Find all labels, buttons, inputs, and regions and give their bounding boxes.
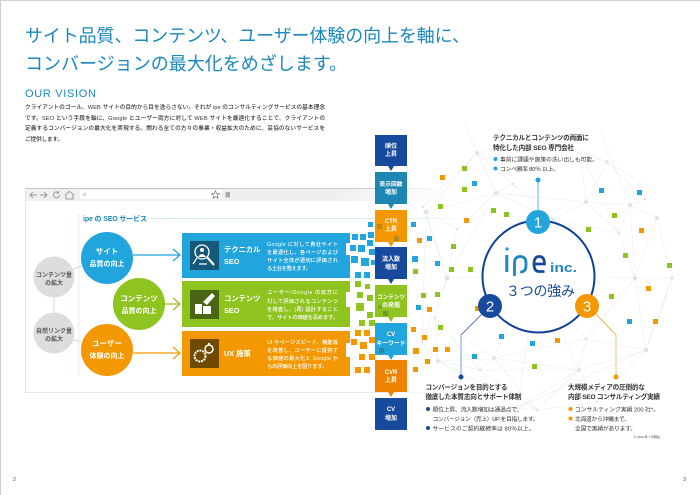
strength 2 text: コンバージョン（売上）UP を目指します。: [432, 415, 538, 423]
step: rank up: [375, 135, 407, 171]
logo: ipe inc: ３つの強み: [506, 283, 575, 299]
logo: ipe inc: [505, 247, 577, 299]
connectors between circles: [54, 265, 127, 343]
network background: [421, 120, 674, 411]
page number right: 3: [683, 477, 686, 483]
step: content discovery: の発掘: [382, 301, 400, 309]
strength 3 text: コンサルティング実績 200 社*。: [575, 406, 659, 414]
title: [25, 26, 470, 74]
circle: natural links: [34, 312, 74, 354]
step: cv keyword: キーワード: [376, 340, 406, 347]
panel: technical seo: サイト全体が適切に評価され: [267, 256, 339, 264]
arrow: site quality: [133, 249, 180, 261]
step: traffic: 増加: [385, 263, 397, 271]
circle: content quality: 品質の向上: [122, 306, 156, 315]
text block: vision body: ご提供します。: [25, 135, 63, 143]
strength 1 text: 特化した内部 SEO 専門会社: [493, 143, 574, 152]
panel: content seo: SEO: [224, 306, 240, 315]
strength 3 text: 全国で実績があります。: [575, 424, 636, 432]
strength 2 text: [426, 382, 538, 432]
panel: technical seo: テクニカル: [224, 245, 261, 254]
step: impressions: 表示回数: [379, 180, 403, 188]
badge 2: 2: [486, 298, 494, 316]
strength 2 text: コンバージョンを目的とする: [426, 382, 508, 392]
panel: ux: を改善し、ユーザーに提供す: [267, 346, 338, 354]
panel: ux: らの評価向上を図ります。: [267, 362, 327, 370]
panel: content seo: ユーザー/Google の双方に: [267, 288, 338, 296]
ipe big circle: [482, 220, 594, 332]
circle: content quality: コンテンツ: [120, 294, 158, 303]
text block: vision body: 定義するコンバージョンの最大化を実現する。関わる全ての方々の事業・収益拡大のために、妥協のないサービスを: [25, 124, 325, 132]
badge 3: 3: [583, 298, 591, 316]
step: ctr: CTR: [385, 219, 398, 225]
connector lines for strengths: [461, 180, 616, 377]
logo: ipe inc: inc.: [550, 261, 577, 275]
text block: vision body: [25, 103, 325, 143]
circle: content volume: コンテンツ量: [36, 271, 72, 279]
pixel squares leaving panels: [350, 222, 376, 373]
panel: ux: UX 施策: [224, 349, 251, 358]
panel: technical seo: SEO: [224, 257, 240, 266]
step: cvr: 上昇: [385, 376, 397, 384]
panel: content seo: [182, 281, 350, 327]
icon: browser navigation: [30, 191, 230, 199]
badge 1: 1: [534, 214, 542, 232]
circle: user experience: [80, 324, 134, 376]
strength 3 text: 大規模メディアの圧倒的な: [568, 382, 645, 392]
icon: hand with documents: [190, 290, 219, 319]
step: impressions: 増加: [385, 188, 397, 196]
icon: gears: [190, 339, 219, 368]
step: ctr: 上昇: [385, 225, 397, 233]
step: cvr: [375, 360, 407, 397]
panel: technical seo: る土台を整えます。: [267, 264, 311, 272]
dot 3: [614, 374, 618, 380]
step: content discovery: [375, 285, 407, 322]
badge 3: [575, 294, 599, 318]
panel: ux: UI やページスピード、機能等: [267, 338, 339, 346]
step: rank up: 順位: [385, 142, 397, 150]
text block: vision body: です。SEO という手段を軸に、Google とユーザー両方に対して WEB サイトを最適化することで、クライアントの: [25, 114, 325, 122]
panel: technical seo: Google に対して貴社サイト: [267, 240, 338, 248]
circle: site quality: 品質の向上: [90, 259, 124, 268]
icon: person with magnifier: [190, 241, 219, 270]
dot 2: [458, 374, 464, 380]
badge 1: [526, 210, 550, 234]
strength 1 text: [493, 133, 598, 173]
step: traffic: 流入数: [382, 255, 400, 263]
strength 1 text: テクニカルとコンテンツの両面に: [493, 133, 589, 142]
arrow: user experience: [133, 347, 180, 359]
strength 2 text: サービスのご契約継続率は 80％以上。: [432, 424, 534, 432]
step: rank up: 上昇: [385, 150, 397, 158]
step: cv increase: 増加: [385, 414, 397, 422]
panel: content seo: で、サイトの価値を高めます。: [267, 313, 338, 321]
panel: technical seo: [182, 233, 350, 278]
circle: natural links: 自然リンク量: [36, 327, 72, 335]
circle: content quality: [112, 278, 166, 330]
step: cv increase: [375, 398, 407, 430]
scattered squares: [411, 166, 672, 372]
seo service heading: ipe の SEO サービス: [83, 214, 147, 223]
circle: user experience: ユーザー: [92, 339, 122, 348]
panel: content seo: 対して評価されるコンテンツ: [267, 297, 338, 305]
panel: ux: [182, 331, 350, 376]
title: サイト品質、コンテンツ、ユーザー体験の向上を軸に、: [25, 26, 470, 46]
circle: content volume: の拡大: [45, 279, 63, 287]
text block: vision body: クライアントのゴール、WEB サイトの目的から目を逸らさない。それが ipe のコンサルティングサービスの基本理念: [25, 103, 325, 111]
title: コンバージョンの最大化をめざします。: [25, 53, 347, 74]
step: ctr: [375, 210, 407, 247]
browser window: [25, 188, 465, 393]
circle: site quality: サイト: [96, 247, 118, 256]
panel: content seo: コンテンツ: [224, 294, 260, 303]
arrow: content quality: [165, 298, 180, 310]
step: cv increase: CV: [387, 407, 395, 413]
panel: content seo: を精査し、(再) 設計すること: [267, 305, 338, 313]
step: cvr: CVR: [385, 370, 398, 376]
strength 1 text: 事前に課題や施策の洗い出しも可能。: [500, 156, 598, 164]
dot 1: [536, 178, 540, 182]
panel: ux: る価値の最大化と Google か: [267, 354, 339, 362]
step: traffic: [375, 247, 407, 284]
panel: technical seo: を最適化し、各ページおよび: [267, 248, 339, 256]
circle: content volume: [34, 256, 74, 298]
heading: our vision: OUR VISION: [25, 88, 96, 100]
step: impressions: [375, 172, 407, 209]
step: content discovery: コンテンツ: [377, 294, 405, 301]
badge 2: [478, 294, 502, 318]
circle: natural links: の拡大: [45, 335, 63, 343]
strength 1 text: コンペ勝率 80％ 以上。: [500, 165, 559, 173]
page number left: 2: [13, 477, 16, 483]
funnel stack: [375, 135, 407, 430]
strength 3 text: ※ 2014 年 7 月現在: [633, 434, 660, 439]
circle: site quality: [81, 232, 133, 284]
strength 3 text: 内部 SEO コンサルティング実績: [568, 392, 660, 401]
step: cv keyword: [375, 323, 407, 360]
strength 3 text: 北海道から沖縄まで、: [575, 415, 630, 423]
strength 3 text: [568, 382, 660, 439]
step: cv keyword: CV: [387, 332, 395, 338]
circle: user experience: 体験の向上: [90, 351, 124, 360]
strength 2 text: 順位上昇、流入数増加は通過点で、: [432, 406, 522, 414]
strength 2 text: 徹底した本質志向とサポート体制: [426, 392, 522, 401]
